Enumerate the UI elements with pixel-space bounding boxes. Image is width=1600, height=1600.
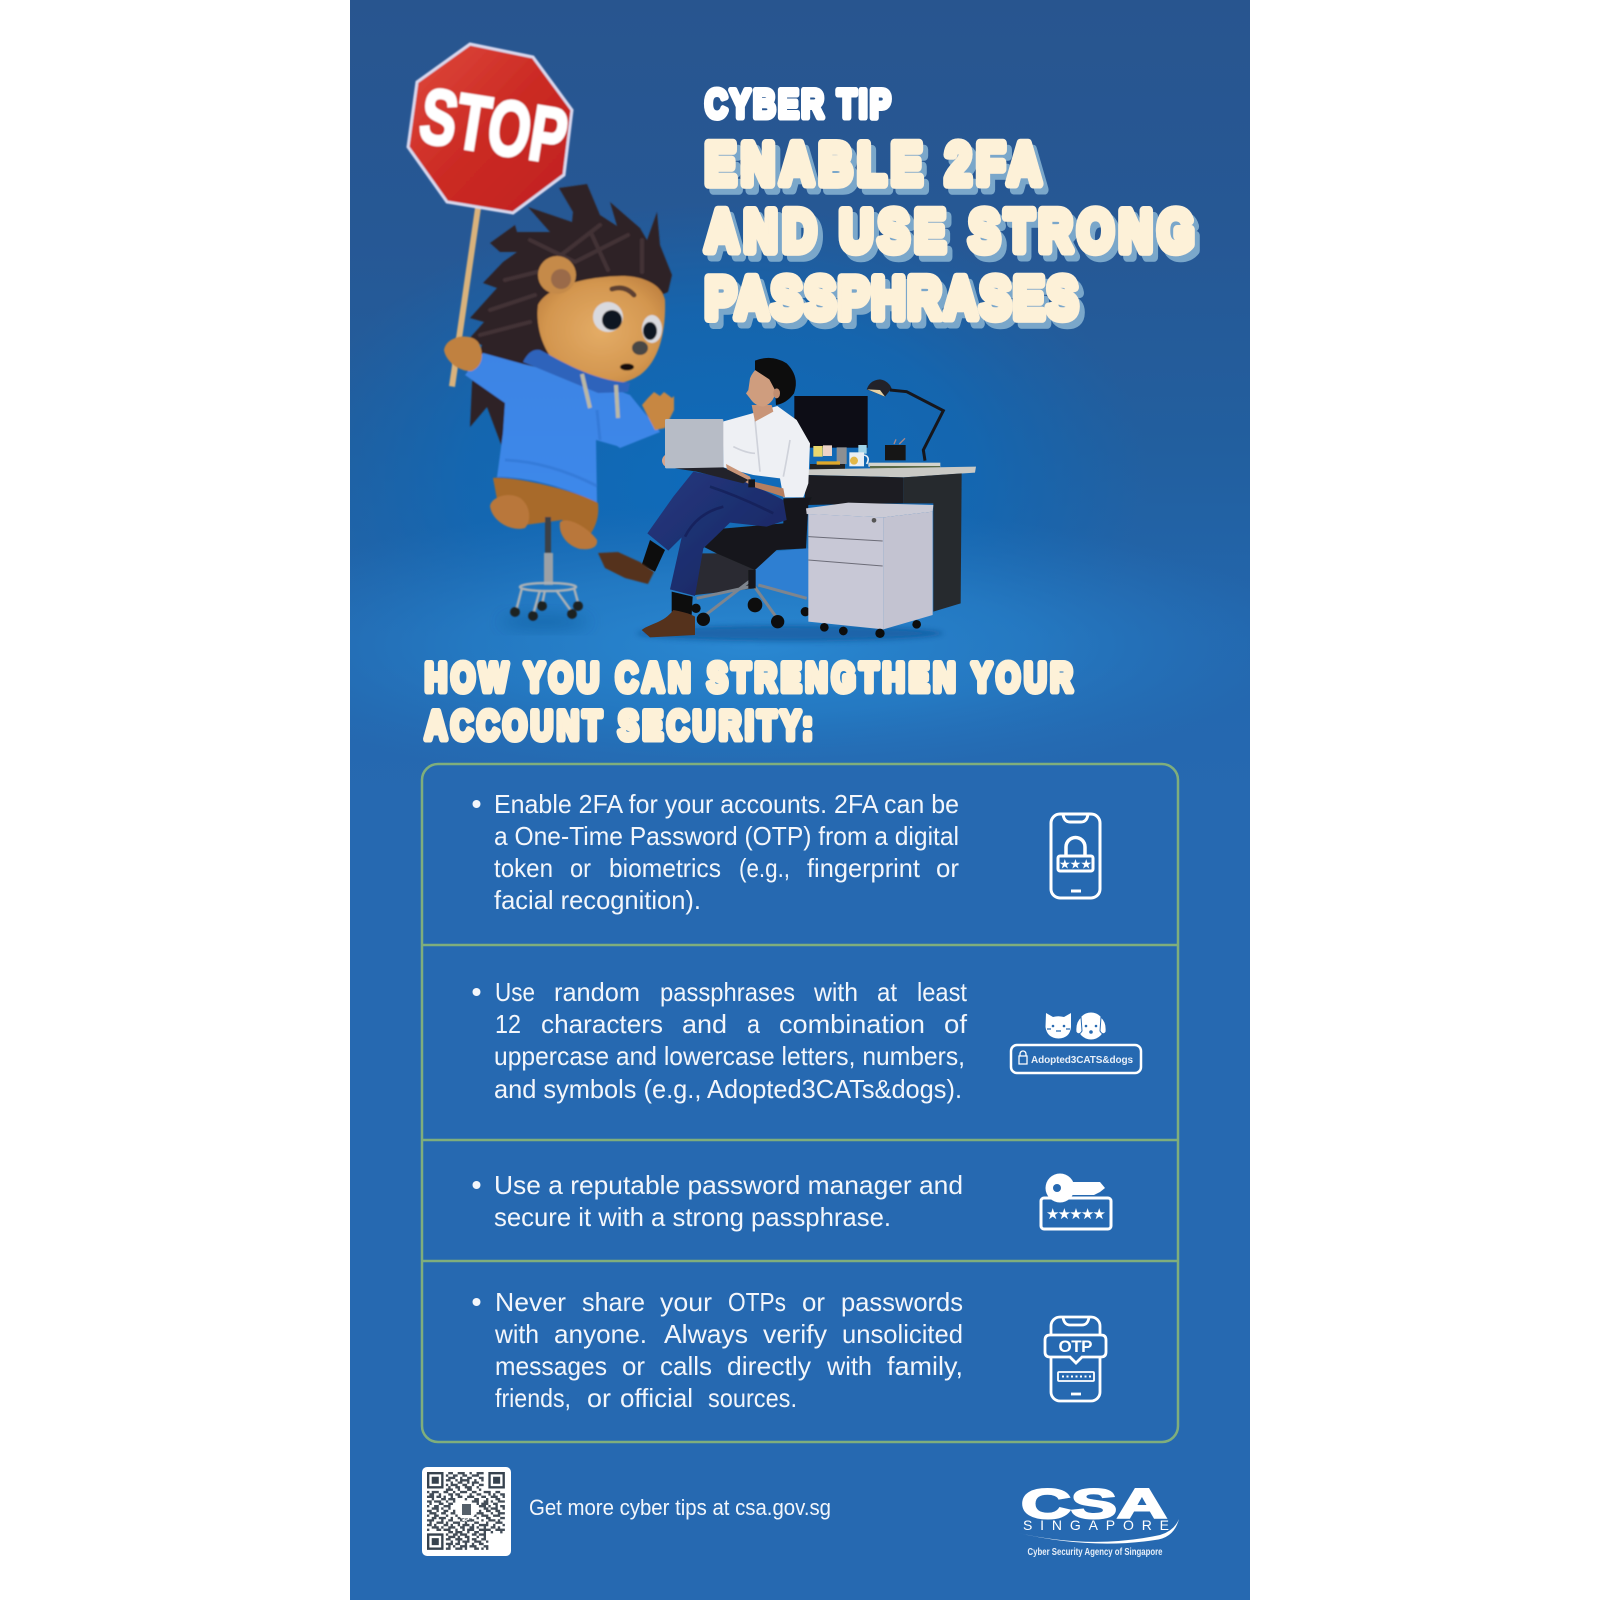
laptop xyxy=(665,419,748,483)
tip 2 text: and xyxy=(682,1009,727,1039)
title block xyxy=(705,82,1194,331)
tip 4 text: family, xyxy=(887,1351,963,1381)
tip 2 text: at xyxy=(877,977,898,1007)
passphrase field xyxy=(1011,1045,1141,1073)
tip 4 text: or xyxy=(622,1351,645,1381)
CSA Singapore logo xyxy=(1014,1480,1179,1558)
subheading: ACCOUNT SECURITY: xyxy=(425,703,813,748)
hedgehog left eye xyxy=(593,302,623,332)
octagon sign xyxy=(408,44,572,213)
hedgehog mouth xyxy=(620,364,634,370)
floor shadow under stool xyxy=(500,616,590,628)
tip 4 text: verify xyxy=(763,1319,827,1349)
man socks xyxy=(642,540,693,615)
QR finder patterns xyxy=(428,1473,504,1549)
tip 4 text: calls xyxy=(660,1351,712,1381)
tip 1 text: or xyxy=(936,853,959,883)
panel: poster background xyxy=(350,0,1250,1600)
subheading: HOW YOU CAN STRENGTHEN YOUR xyxy=(425,655,1073,700)
logo tagline: Cyber Security Agency of Singapore xyxy=(1028,1547,1163,1558)
field lock xyxy=(1019,1051,1027,1064)
man shirt xyxy=(723,406,810,497)
logo wordmark CSA: CSA xyxy=(1021,1480,1167,1527)
tip 2 text: of xyxy=(944,1009,968,1039)
dog face xyxy=(1076,1012,1106,1040)
footer text: Get more cyber tips at csa.gov.sg xyxy=(529,1495,831,1520)
tip 4 text: anyone. xyxy=(554,1319,647,1349)
tip 4 text: Never xyxy=(495,1287,566,1317)
tip 4 text: or xyxy=(802,1287,825,1317)
tip 2 text: combination xyxy=(779,1009,925,1039)
chair xyxy=(691,497,812,628)
tip 4 text: directly xyxy=(727,1351,811,1381)
man forearms xyxy=(662,454,785,497)
QR code xyxy=(422,1467,511,1556)
tip 1 text: Enable 2FA for your accounts. 2FA can be xyxy=(494,789,959,819)
tip 4 text: your xyxy=(660,1287,712,1317)
man face xyxy=(746,368,777,407)
icon: phone with OTP message: OTP xyxy=(1058,1337,1092,1356)
tip 2 text: 12 xyxy=(495,1009,521,1039)
hedgehog nose xyxy=(632,341,648,355)
far shoe of man xyxy=(598,552,654,584)
tip 3 text: Use a reputable password manager and xyxy=(494,1170,963,1200)
icon: key and masked password: ★★★★★ xyxy=(1046,1205,1106,1223)
tip 4 text: passwords xyxy=(841,1287,963,1317)
desk xyxy=(695,467,976,612)
tip 1 text: facial recognition). xyxy=(494,885,701,915)
hedgehog stool xyxy=(510,517,583,621)
icon: phone with padlock xyxy=(1051,814,1100,898)
tip 4 text: sources. xyxy=(708,1383,797,1413)
tip 1 text: token xyxy=(494,853,553,883)
floor shadow xyxy=(637,625,943,642)
tip 1 text: (e.g., xyxy=(739,853,790,883)
icon: cat, dog and passphrase field xyxy=(1011,1012,1141,1073)
man shoe xyxy=(642,610,695,637)
panel: tips table xyxy=(422,764,1178,1442)
desk lamp xyxy=(867,379,943,461)
monitor xyxy=(794,396,868,464)
subheading xyxy=(425,655,1073,748)
tip 4 text xyxy=(472,1287,963,1413)
filing cabinet xyxy=(806,503,933,638)
hedgehog open paw xyxy=(642,392,674,430)
sign pole xyxy=(449,208,481,387)
tip 4 text: with xyxy=(494,1319,539,1349)
tip 1 text xyxy=(472,789,959,915)
hedgehog spikes xyxy=(468,184,672,447)
icon: phone with padlock: ★★★ xyxy=(1059,858,1092,872)
sign word STOP: STOP xyxy=(414,71,573,181)
main title: PASSPHRASES xyxy=(705,266,1078,331)
tip 1 text: or xyxy=(570,853,591,883)
tip 3 text xyxy=(472,1170,963,1232)
office scene: man at desk xyxy=(637,358,976,642)
hedgehog raised paw holding pole xyxy=(444,336,482,371)
main title xyxy=(705,132,1194,331)
hedgehog brows xyxy=(612,288,634,295)
tip 4 text: with xyxy=(826,1351,872,1381)
main title: ENABLE 2FA xyxy=(705,132,1041,197)
tip 4 text: official xyxy=(620,1383,693,1413)
logo SINGAPORE: SINGAPORE xyxy=(1023,1517,1169,1533)
cat face xyxy=(1046,1013,1071,1038)
hedgehog ear xyxy=(538,256,576,294)
QR data modules xyxy=(427,1473,505,1549)
mug xyxy=(849,452,868,466)
tip 2 text: uppercase and lowercase letters, numbers, xyxy=(494,1041,965,1071)
man ear xyxy=(773,388,780,398)
sticky notes xyxy=(813,445,867,457)
passphrase example: Adopted3CATS&dogs xyxy=(1031,1055,1133,1066)
tip 2 text: with xyxy=(813,977,858,1007)
hedgehog legs and feet xyxy=(490,478,598,549)
hoodie xyxy=(465,350,660,502)
tip 2 text: a xyxy=(747,1009,760,1039)
hedgehog head xyxy=(537,276,665,385)
tip 4 text: or xyxy=(587,1383,611,1413)
eyebrow: cyber tip: CYBER TIP xyxy=(705,82,891,126)
QR centre logo: CSA xyxy=(461,1518,472,1524)
tip 2 text: least xyxy=(917,977,968,1007)
pen holder xyxy=(885,438,906,460)
tip 1 text: fingerprint xyxy=(807,853,921,883)
tip 2 text: characters xyxy=(541,1009,663,1039)
desk items xyxy=(810,461,940,471)
tip 4 text: unsolicited xyxy=(842,1319,963,1349)
mascot: hedgehog in blue hoodie on stool xyxy=(444,184,674,628)
man neck xyxy=(752,405,773,422)
tip 4 text: messages xyxy=(495,1351,607,1381)
tip 2 text: and symbols (e.g., Adopted3CATs&dogs). xyxy=(494,1074,962,1104)
tip 1 text: biometrics xyxy=(609,853,721,883)
man hair xyxy=(755,358,796,405)
tip 4 text: friends, xyxy=(495,1383,571,1413)
tip 1 text: a One-Time Password (OTP) from a digital xyxy=(494,821,959,851)
tip 4 text: share xyxy=(582,1287,645,1317)
tip 2 text: passphrases xyxy=(660,977,795,1007)
icon: phone with OTP message xyxy=(1045,1317,1106,1401)
tip 2 text: Use xyxy=(495,977,535,1007)
icon: key and masked password xyxy=(1041,1174,1111,1229)
stop sign on a pole xyxy=(408,44,573,387)
tip 4 text: OTPs xyxy=(728,1287,786,1317)
hedgehog right eye xyxy=(642,315,662,343)
tip 2 text xyxy=(472,977,968,1104)
tip 4 text: Always xyxy=(664,1319,748,1349)
tip 3 text: secure it with a strong passphrase. xyxy=(494,1202,891,1232)
main title: AND USE STRONG xyxy=(705,199,1194,264)
logo swoosh xyxy=(1014,1519,1179,1544)
tip 2 text: random xyxy=(554,977,640,1007)
man trousers xyxy=(647,472,787,596)
